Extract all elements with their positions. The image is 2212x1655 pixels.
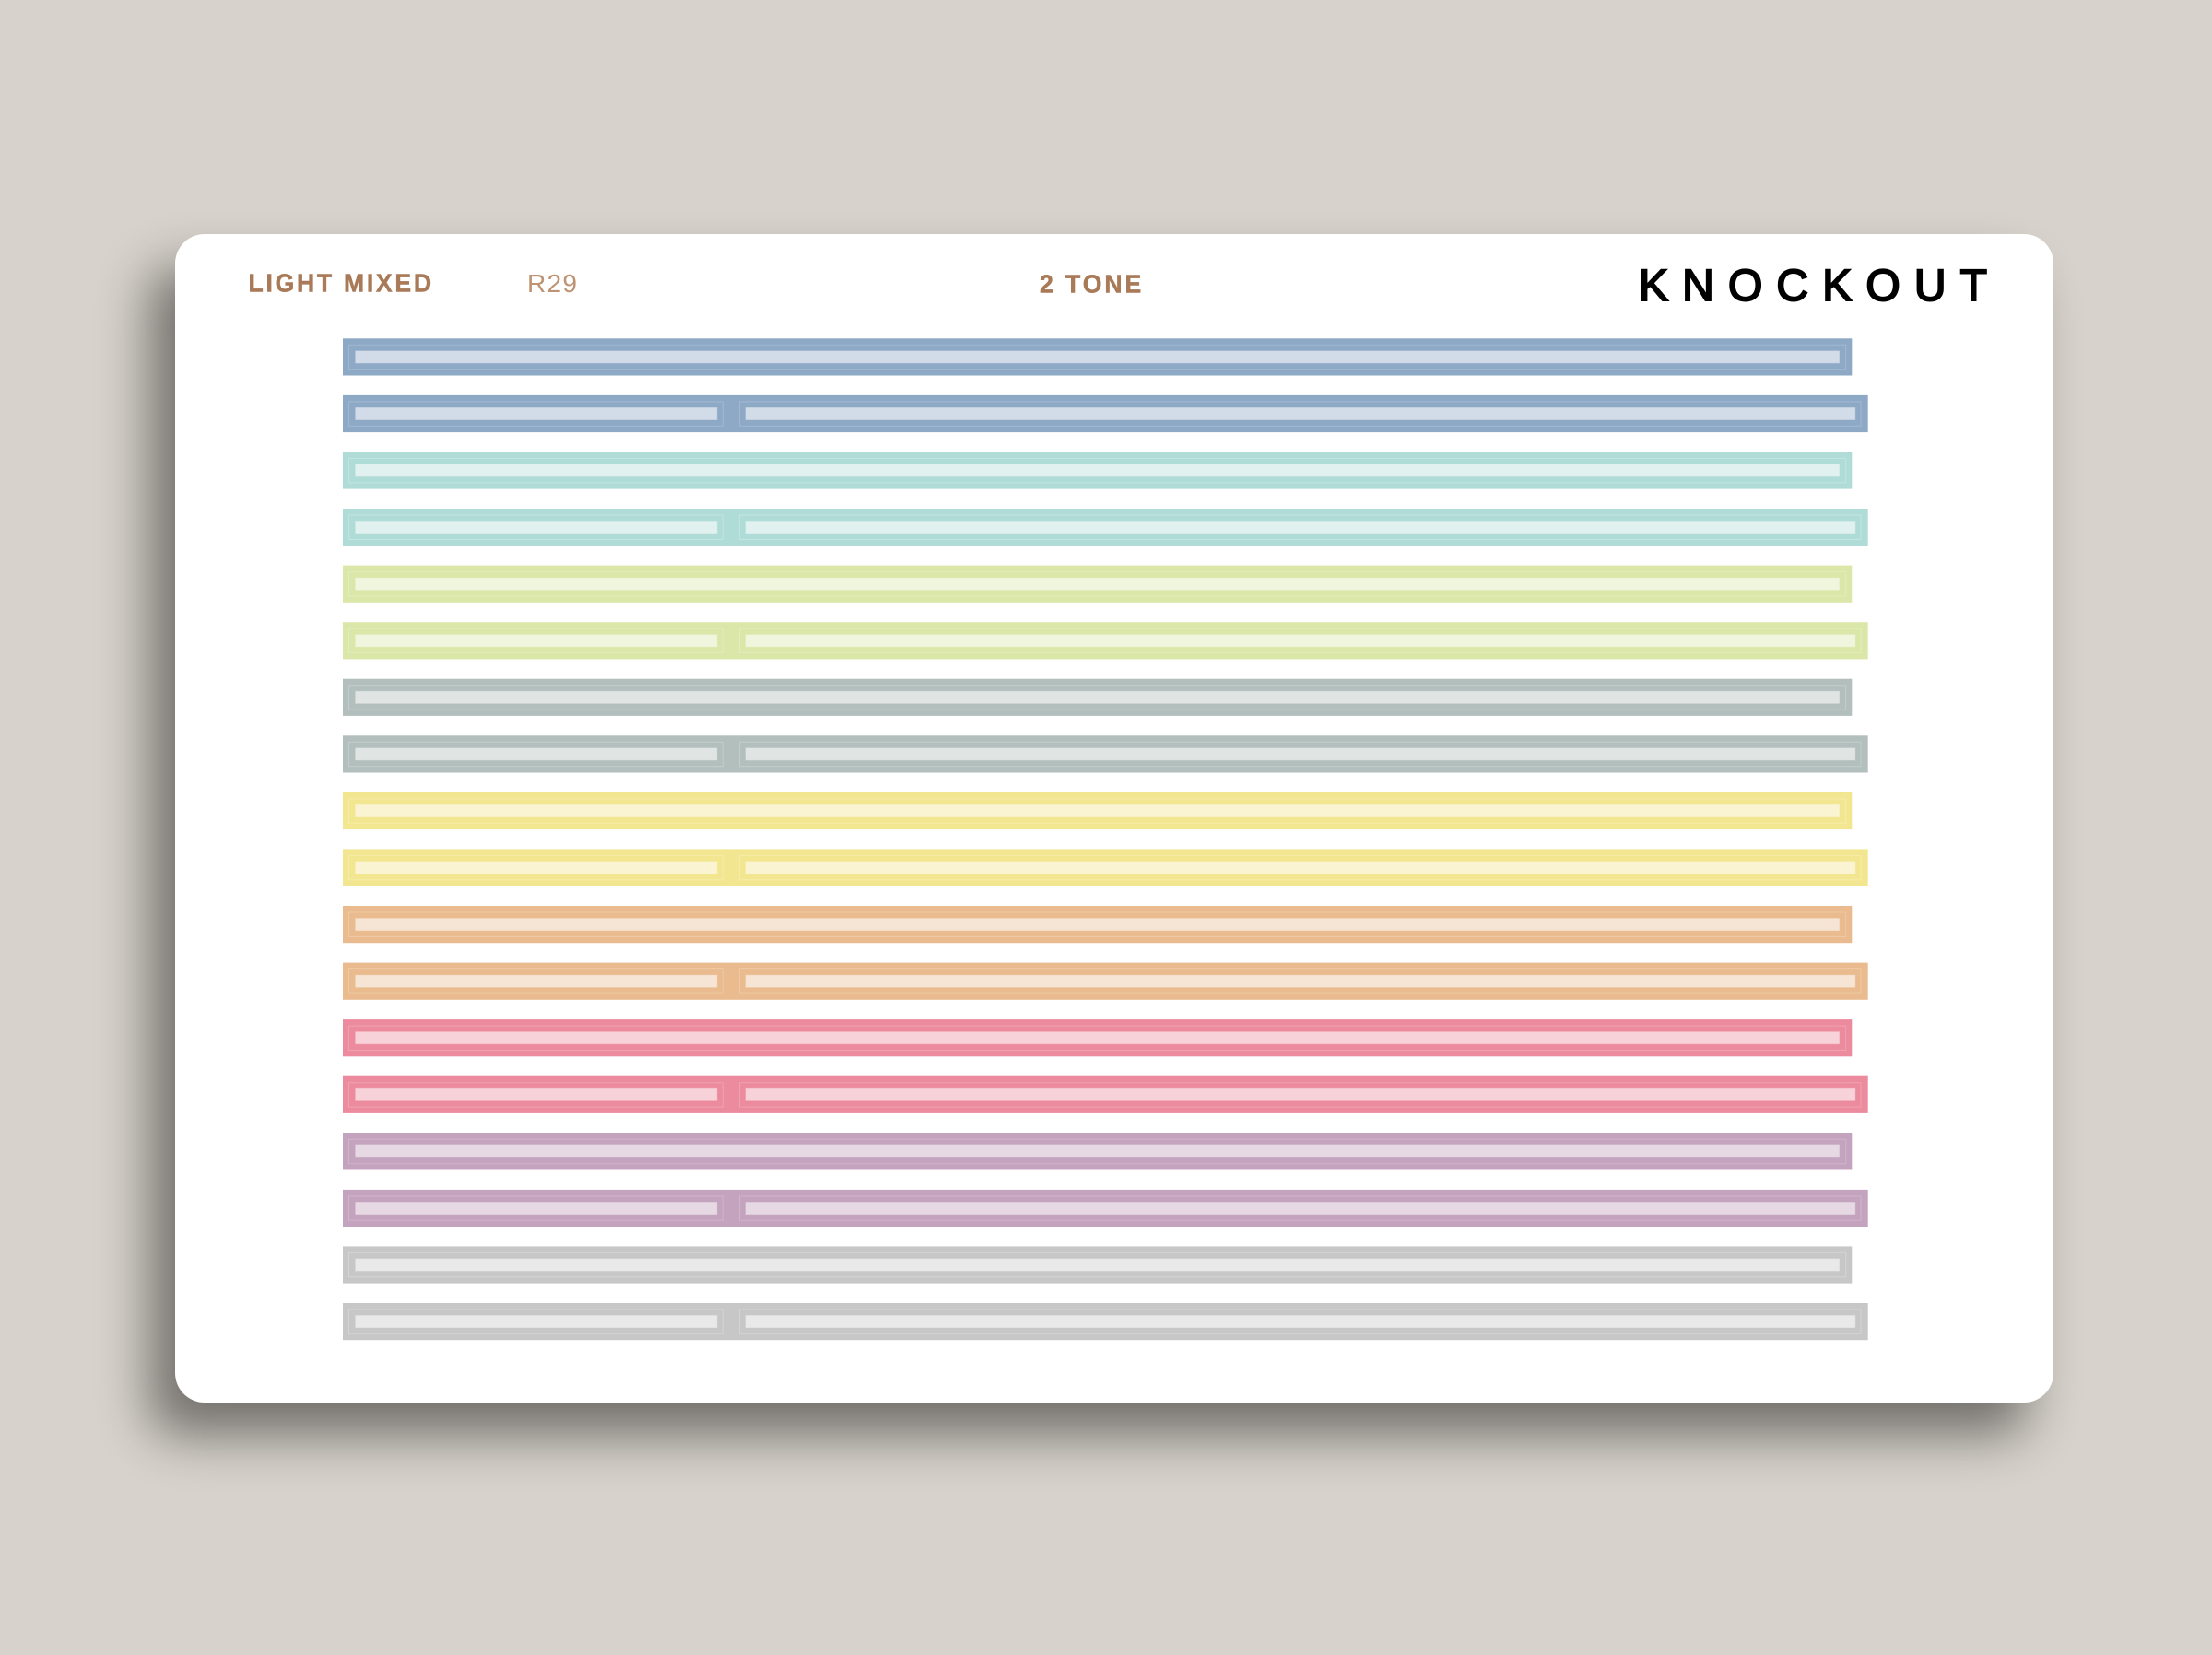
heading: tone type: 2 TONE — [1040, 269, 1141, 299]
bar: pink single — [343, 1019, 1852, 1056]
bar: grey split — [343, 1303, 1868, 1340]
bar: blue split — [343, 395, 1868, 432]
bar: green single — [343, 566, 1852, 603]
bar: grey single — [343, 1246, 1852, 1284]
bar: pink split — [343, 1076, 1868, 1113]
bar: teal single — [343, 452, 1852, 489]
bar: sage single — [343, 679, 1852, 716]
bar: yellow split — [343, 849, 1868, 886]
bar: purple single — [343, 1133, 1852, 1170]
text: product code: R29 — [527, 269, 577, 298]
bar: purple split — [343, 1190, 1868, 1227]
panel: white sticker card with drop shadow — [175, 234, 2053, 1403]
bar: yellow single — [343, 792, 1852, 829]
bar: green split — [343, 622, 1868, 659]
bar: orange single — [343, 906, 1852, 943]
bar: sage split — [343, 735, 1868, 772]
bar: orange split — [343, 963, 1868, 1000]
title: style name: KNOCKOUT — [1639, 262, 1987, 311]
heading: collection name: LIGHT MIXED — [249, 268, 431, 298]
bar: teal split — [343, 509, 1868, 546]
bar: blue single — [343, 338, 1852, 376]
